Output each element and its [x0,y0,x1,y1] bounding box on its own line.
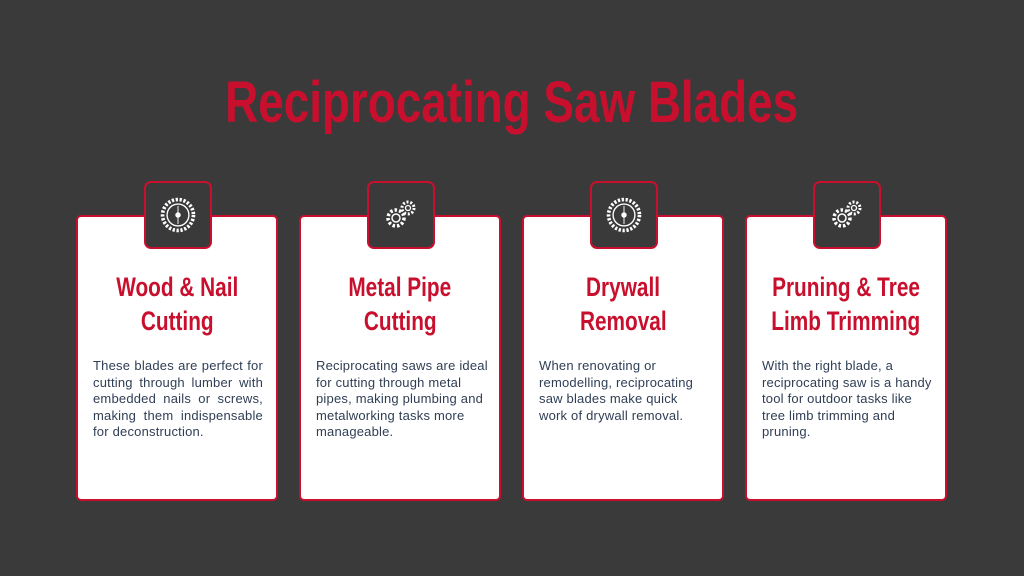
text block: These blades are perfect for cutting through lumber with embedded nails or screws, making them indispensable for deconstruction. [93,358,263,439]
panel: drywall [522,215,724,501]
heading [349,272,451,336]
text block: work of drywall removal. [539,408,683,423]
text block: metalworking tasks more [316,408,464,423]
icon: saw blade [144,181,212,249]
heading: Metal Pipe [349,272,451,302]
text block: With the right blade, a [762,358,893,373]
title: Reciprocating Saw Blades [226,70,798,135]
icon: gears [367,181,435,249]
text block: tool for outdoor tasks like [762,391,912,406]
text block: pipes, making plumbing and [316,391,483,406]
heading: Removal [580,306,666,336]
icon: saw blade [590,181,658,249]
text block: When renovating or [539,358,656,373]
text block: tree limb trimming and [762,408,895,423]
text block: for cutting through metal [316,375,461,390]
heading: Limb Trimming [771,306,920,336]
text block: manageable. [316,424,393,439]
heading: Drywall [586,272,660,302]
heading: Pruning & Tree [772,272,920,302]
heading [771,272,920,336]
text block [539,358,693,423]
heading: Wood & Nail [116,272,238,302]
text block: reciprocating saw is a handy [762,375,932,390]
text block [316,358,488,439]
text block: saw blades make quick [539,391,678,406]
panel: pruning [745,215,947,501]
heading: Cutting [364,306,436,336]
heading [580,272,666,336]
icon: gears [813,181,881,249]
text block: pruning. [762,424,811,439]
text block [762,358,932,439]
panel: metal pipe [299,215,501,501]
heading [116,272,238,336]
text block: Reciprocating saws are ideal [316,358,488,373]
panel: wood & nail [76,215,278,501]
heading: Cutting [141,306,213,336]
text block: remodelling, reciprocating [539,375,693,390]
